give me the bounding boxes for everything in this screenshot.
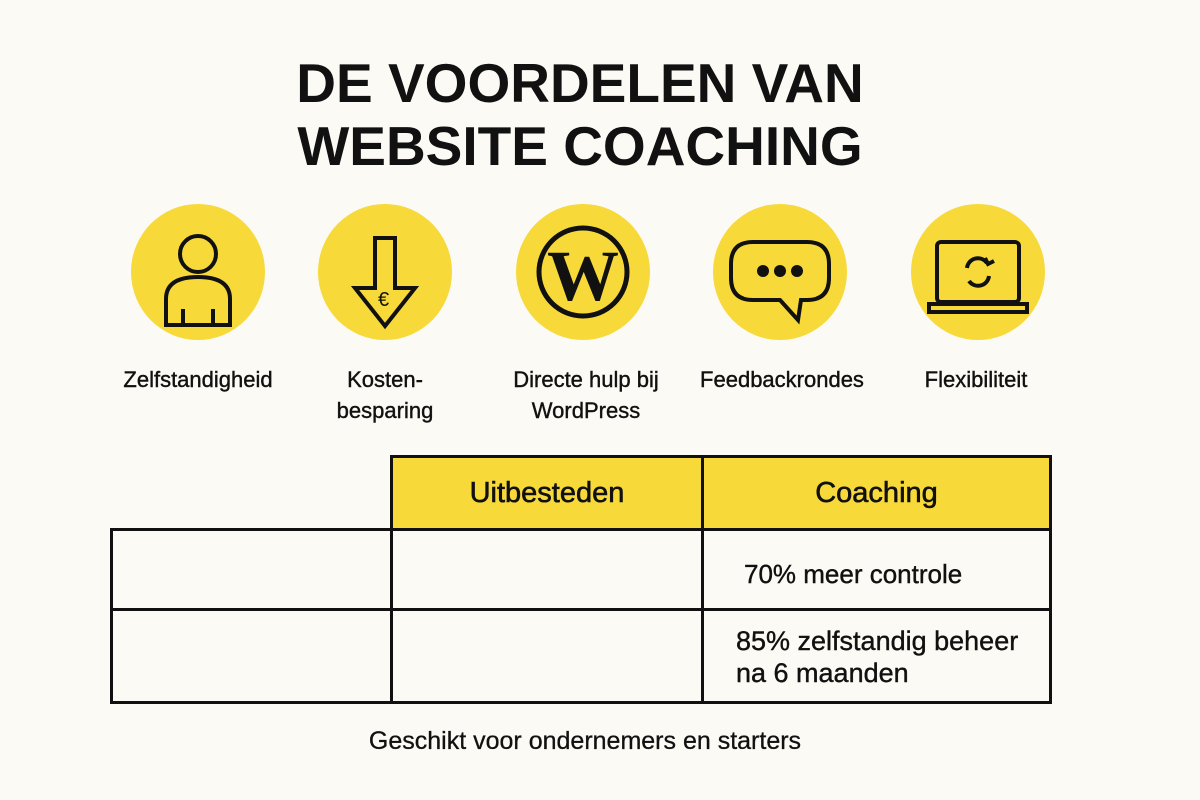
cell: 85%: na 6 maanden xyxy=(736,658,909,688)
icon: speech bubble xyxy=(713,204,847,340)
icon: person xyxy=(131,204,265,340)
label: Kostenbesparing xyxy=(337,367,433,423)
comparison table xyxy=(110,455,1052,704)
label: Directe hulp: WordPress xyxy=(532,398,640,423)
label: Feedbackrondes: Feedbackrondes xyxy=(700,367,864,392)
cell: 85%: 85% zelfstandig beheer xyxy=(736,626,1018,656)
label: Flexibiliteit: Flexibiliteit xyxy=(925,367,1027,392)
icon: laptop refresh xyxy=(911,204,1045,340)
cell: 85% xyxy=(701,608,1052,704)
cell: 70% xyxy=(701,528,1052,611)
icon: euro arrow xyxy=(318,204,452,340)
footer text: Geschikt voor ondernemers en starters xyxy=(369,727,801,755)
title: WEBSITE COACHING xyxy=(297,115,863,177)
label: Zelfstandigheid: Zelfstandigheid xyxy=(123,367,273,392)
title: DE VOORDELEN VAN xyxy=(296,52,864,114)
icon: wordpress xyxy=(516,204,650,340)
header: Uitbesteden: Uitbesteden xyxy=(470,477,624,509)
label: Kostenbesparing: besparing xyxy=(337,398,433,423)
title xyxy=(296,52,864,177)
header: Uitbesteden xyxy=(390,455,704,531)
icon: euro arrow: € xyxy=(378,289,389,311)
header: Coaching xyxy=(701,455,1052,531)
cell: 70%: 70% meer controle xyxy=(744,559,962,589)
header: Coaching: Coaching xyxy=(815,477,938,509)
icon: wordpress: W xyxy=(547,236,619,316)
label: Kostenbesparing: Kosten- xyxy=(347,367,423,392)
label: Directe hulp: Directe hulp bij xyxy=(513,367,659,392)
label: Directe hulp xyxy=(513,367,659,423)
